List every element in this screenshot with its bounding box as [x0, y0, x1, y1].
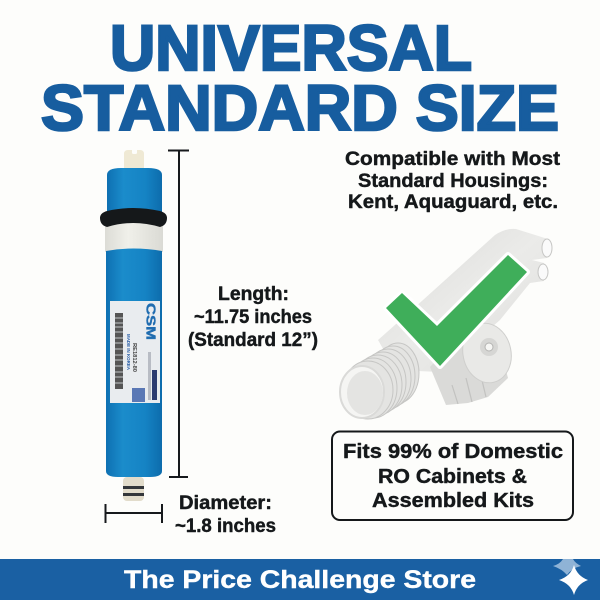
icon: sparkle: [553, 559, 588, 595]
length label: (Standard 12”): [188, 329, 318, 351]
callout: fits 99%: Assembled Kits: [372, 490, 534, 512]
nut centre: [480, 338, 498, 356]
main blue body: [106, 248, 162, 477]
icon: white plastic fitting: [340, 229, 552, 419]
small print: [148, 352, 151, 400]
bottom nipple: [123, 477, 144, 501]
top cream cap: [124, 150, 144, 172]
compatibility text: [345, 148, 561, 213]
brand: CSM: [144, 303, 158, 340]
icon: RO membrane cartridge: [100, 150, 167, 501]
callout: fits 99%: [332, 432, 573, 520]
barcode: [115, 313, 123, 389]
upper blue section: [107, 168, 162, 214]
diameter label: [175, 492, 276, 537]
model: RE1812-80: [131, 343, 137, 372]
dark tag: [152, 370, 157, 400]
compatibility text: Kent, Aquaguard, etc.: [348, 191, 558, 213]
elbow nubs: [542, 239, 552, 257]
diameter dimension line: [105, 504, 162, 523]
store name: The Price Challenge Store: [124, 566, 476, 594]
black O-ring: [100, 208, 167, 227]
length label: ~11.75 inches: [194, 306, 312, 328]
made in: MADE IN KOREA: [126, 334, 131, 371]
callout: fits 99%: Fits 99% of Domestic: [343, 441, 563, 463]
QR code: [132, 388, 145, 402]
compatibility text: Compatible with Most: [345, 148, 561, 170]
threaded end: [343, 343, 419, 419]
white collar: [105, 220, 163, 252]
hex nut: [430, 325, 508, 405]
compatibility text: Standard Housings:: [358, 170, 548, 192]
callout: fits 99%: RO Cabinets &: [378, 466, 527, 488]
title: STANDARD SIZE: [41, 72, 559, 144]
product label: [110, 301, 160, 403]
length dimension line: [168, 150, 189, 477]
elbow pipe: [378, 229, 548, 372]
title: UNIVERSAL: [110, 12, 472, 84]
footer bar: [0, 559, 600, 600]
pipe opening: [340, 366, 384, 418]
length label: [188, 283, 318, 351]
title: [41, 12, 559, 144]
icon: green check mark: [386, 255, 527, 366]
length label: Length:: [218, 283, 289, 305]
diameter label: ~1.8 inches: [175, 515, 276, 537]
diameter label: Diameter:: [179, 492, 272, 514]
